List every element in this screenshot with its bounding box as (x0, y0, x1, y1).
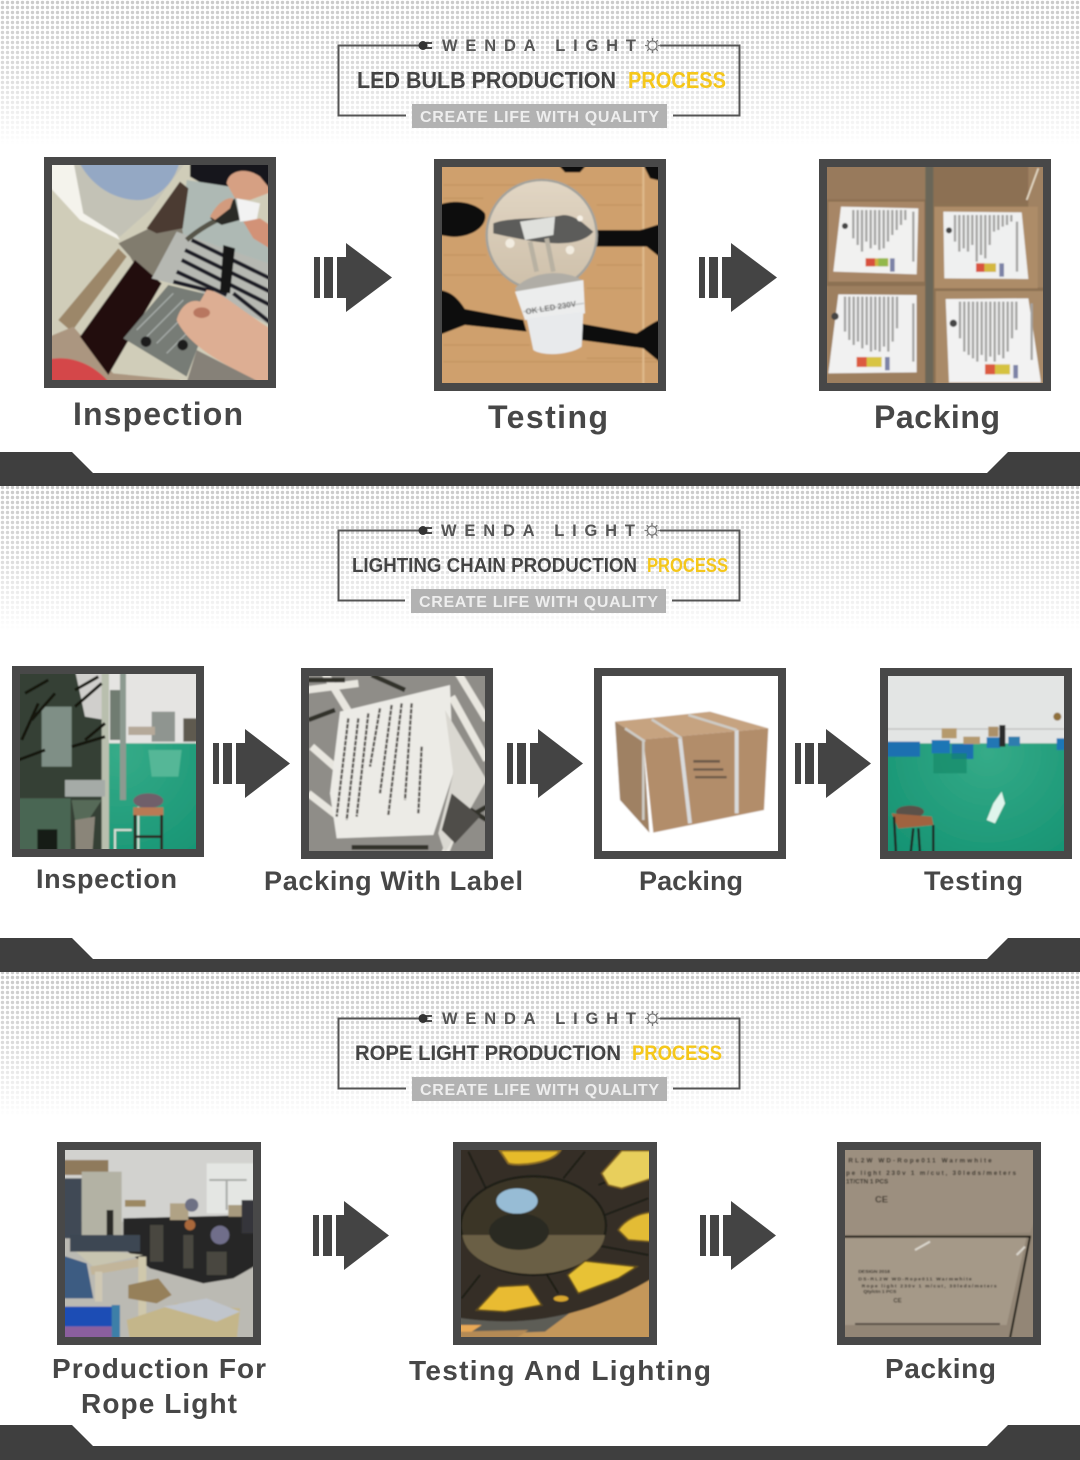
title: PROCESS (647, 554, 728, 577)
arrow: inspection to testing (314, 243, 392, 312)
tagline bar: CREATE LIFE WITH QUALITY (420, 1082, 659, 1099)
arrow: packing to testing (795, 729, 871, 798)
title: ROPE LIGHT PRODUCTION (355, 1041, 621, 1065)
photo: packing, printed cardboard cartons: RL2W WD-Rope011 Warmwhite (848, 1157, 992, 1164)
icon: plug (418, 41, 432, 50)
photo: packing, printed cardboard cartons (837, 1142, 1041, 1345)
photo: testing, glass bulb on wooden jig: OK LED 230V (525, 299, 577, 316)
panel: LED bulb photos (44, 157, 1051, 391)
divider band 2 (0, 938, 1080, 972)
brand name: WENDA LIGHT (442, 37, 636, 55)
divider band 1 (0, 452, 1080, 486)
icon: plug (418, 526, 432, 535)
tagline bar (412, 1077, 667, 1101)
photo: packing, printed cardboard cartons: 1T/CTN 1 PCS (846, 1178, 888, 1185)
header: lighting chain production process (338, 522, 740, 613)
panel: lighting chain photos (12, 666, 1072, 859)
header: LED bulb production process (338, 37, 740, 128)
header: rope light production process (338, 1010, 740, 1101)
divider band 3 (0, 1425, 1080, 1460)
photo: packing, printed cardboard cartons: CE (875, 1194, 888, 1204)
tagline bar: CREATE LIFE WITH QUALITY (419, 594, 658, 611)
photo: inspection, injection machines on green floor (12, 666, 204, 857)
label: Production For Rope Light (52, 1353, 266, 1419)
photo: production for rope light, cluttered workshop (57, 1142, 261, 1345)
photo: packing, printed cardboard cartons: Rope light 230v 1 m/cut, 30leds/meters (862, 1284, 997, 1290)
arrow: packing with label to packing (507, 729, 583, 798)
title: LED BULB PRODUCTION (357, 67, 616, 93)
photo: testing and lighting, glowing rope light reel (453, 1142, 657, 1345)
photo: testing, green workshop floor (880, 668, 1072, 859)
label: Packing: Packing (874, 399, 1000, 435)
label: Testing And Lighting: Testing And Lighting (409, 1355, 711, 1386)
title: PROCESS (628, 67, 726, 93)
brand name: WENDA LIGHT (442, 1010, 636, 1028)
icon: sun (645, 38, 660, 53)
photo: packing, printed cardboard cartons: DESIGN 2018 (858, 1269, 890, 1275)
tagline bar (411, 589, 666, 613)
photo: packing, boxes with white labels (819, 159, 1051, 391)
photo: testing, glass bulb on wooden jig (434, 159, 666, 391)
arrow: production to testing (313, 1201, 389, 1270)
label: Production For Rope Light: Rope Light (81, 1388, 237, 1419)
icon: sun (645, 1011, 660, 1026)
title: LIGHTING CHAIN PRODUCTION (352, 554, 637, 577)
photo: packing with label, printed sheet on cables (301, 668, 493, 859)
title: PROCESS (632, 1041, 722, 1065)
photo: packing, printed cardboard cartons: Qty/ctn 1 PCS (863, 1289, 897, 1295)
icon: sun (644, 523, 660, 538)
photo: packing, printed cardboard cartons: DS-RL2W WD-Rope011 Warmwhite (858, 1277, 972, 1283)
tagline bar: CREATE LIFE WITH QUALITY (420, 109, 659, 126)
photo: inspection, hands working on cables (44, 157, 276, 388)
brand name: WENDA LIGHT (441, 522, 635, 540)
label: Packing: Packing (885, 1353, 996, 1384)
arrow: inspection to packing with label (213, 729, 290, 798)
arrow: testing to packing (700, 1201, 776, 1270)
photo: packing, strapped carton on white (594, 668, 786, 859)
panel: rope light photos (57, 1142, 1041, 1345)
photo: packing, printed cardboard cartons: CE (893, 1298, 902, 1304)
arrow: testing to packing (699, 243, 777, 312)
label: Production For Rope Light: Production For (52, 1353, 266, 1384)
icon: plug (418, 1014, 432, 1023)
label: Testing: Testing (488, 399, 608, 435)
label: Testing: Testing (924, 866, 1023, 896)
label: Inspection: Inspection (73, 396, 243, 432)
photo: packing, printed cardboard cartons: pe light 230v 1 m/cut, 30leds/meters (846, 1170, 1016, 1177)
label: Packing With Label: Packing With Label (264, 866, 523, 896)
label: Inspection: Inspection (36, 864, 177, 894)
tagline bar (412, 104, 667, 128)
label: Packing: Packing (639, 866, 743, 896)
